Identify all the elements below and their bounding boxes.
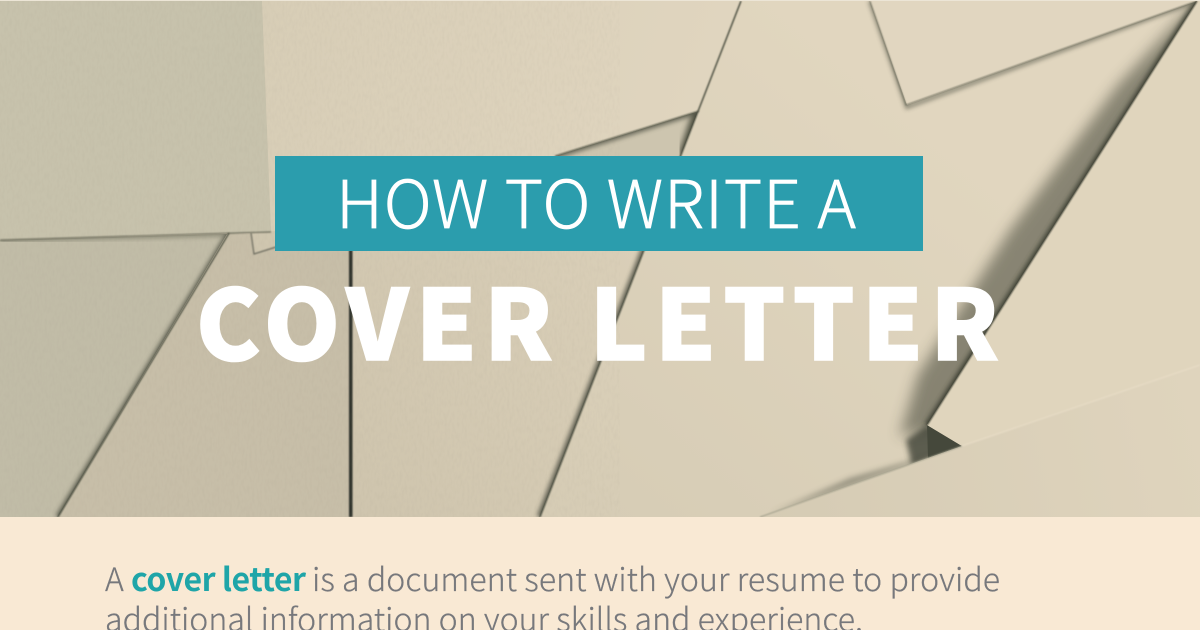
sheet edge lines [58,1,1200,517]
intro panel [0,517,1200,630]
soft wide shadow along long diagonal [900,0,1200,436]
dark shadow wedge at paper corner [906,425,962,466]
paper grain texture [0,0,620,517]
title: cover letter: COVER LETTER [196,247,999,388]
intro text [105,555,1000,630]
intro text: A [105,555,124,601]
paper sheet: large right of diagonal [540,0,1200,517]
intro text: is a document sent with your resume to provide [312,555,1000,601]
title banner [275,152,923,251]
faint shadow along lower sheet edge [781,458,916,508]
paper sheet: top left [0,1,276,254]
paper sheet: top center [556,1,741,156]
paper sheet: lower left [0,233,230,517]
shadowed gap under top sheet [556,112,698,156]
top edge highlight [0,0,1200,1]
intro text: cover letter [131,555,306,601]
paper sheet: lower right [912,446,962,464]
paper sheet: lower middle-left [58,233,351,517]
paper sheet: top-right flap [870,1,1197,107]
paper sheet: center [354,251,644,517]
title line: how to write a: HOW TO WRITE A [336,152,856,248]
paper sheet: right [927,1,1200,446]
